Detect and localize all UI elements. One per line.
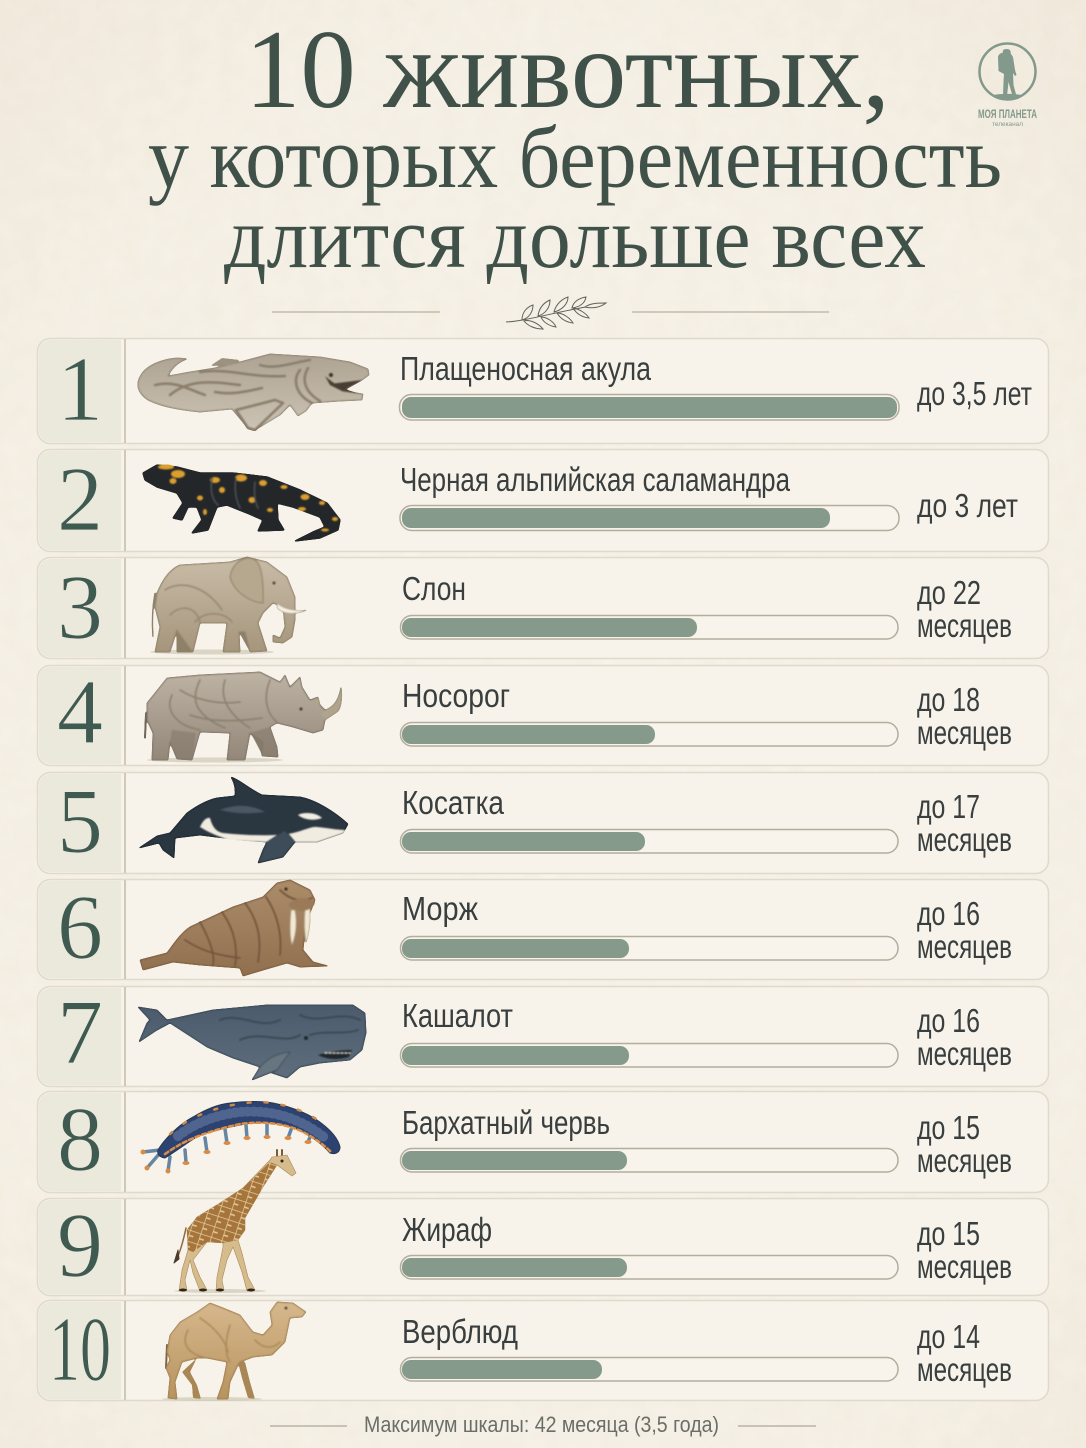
- duration: [917, 1215, 1012, 1285]
- logo: Моя Планета: телеканал: [992, 121, 1023, 128]
- title: у которых беременность: [148, 110, 1002, 207]
- duration: месяцев: [917, 1035, 1012, 1072]
- footer: scale note: Максимум шкалы: 42 месяца (3,5 года): [364, 1412, 719, 1437]
- title: 10 животных,: [245, 8, 890, 132]
- duration: до 15: [917, 1109, 980, 1146]
- duration: до 16: [917, 1002, 980, 1039]
- duration: месяцев: [917, 1142, 1012, 1179]
- number 8: 8: [57, 1088, 103, 1190]
- panel: row 9: [38, 1194, 1048, 1296]
- number 2: 2: [57, 448, 103, 550]
- duration: месяцев: [917, 714, 1012, 751]
- species name: Бархатный червь: [402, 1104, 610, 1141]
- species name: Носорог: [402, 677, 510, 714]
- duration: [917, 1318, 1012, 1388]
- title: длится дольше всех: [224, 190, 926, 287]
- bar: 15 months: [400, 1256, 898, 1279]
- panel: row 2: [38, 448, 1048, 552]
- icon: sperm whale: [138, 1005, 366, 1080]
- icon: elephant: [150, 557, 307, 654]
- species name: Косатка: [402, 784, 505, 821]
- icon: alpine salamander: [143, 464, 340, 541]
- number 6: 6: [57, 876, 103, 978]
- panel: row 4: [38, 661, 1048, 766]
- panel: row 7: [38, 981, 1048, 1086]
- duration: месяцев: [917, 928, 1012, 965]
- panel: row 6: [38, 876, 1048, 980]
- icon: orca: [139, 777, 348, 863]
- duration: до 3 лет: [917, 487, 1018, 524]
- bar: 18 months: [400, 722, 898, 746]
- bar: 36 months: [400, 506, 899, 530]
- bar: 22 months: [400, 616, 898, 639]
- panel: row 8: [38, 1088, 1048, 1192]
- duration: [917, 1109, 1012, 1179]
- species name: Плащеносная акула: [400, 350, 652, 387]
- bar: 16 months: [400, 936, 898, 960]
- bar: 14 months: [400, 1358, 898, 1381]
- number 1: 1: [57, 338, 103, 440]
- number 10: 10: [49, 1298, 111, 1400]
- duration: до 18: [917, 681, 980, 718]
- title: [148, 8, 1002, 287]
- duration: до 22: [917, 574, 981, 611]
- panel: row 3: [38, 556, 1048, 658]
- duration: до 14: [917, 1318, 980, 1355]
- duration: до 3,5 лет: [917, 375, 1032, 412]
- duration: [917, 895, 1012, 965]
- logo: Моя Планета: [978, 44, 1037, 128]
- panel: row 1: [38, 338, 1048, 444]
- number 4: 4: [57, 661, 103, 763]
- icon: walrus: [140, 880, 328, 976]
- icon: frilled shark: [138, 354, 369, 430]
- icon: velvet worm: [140, 1102, 340, 1174]
- species name: Жираф: [402, 1211, 492, 1248]
- duration: месяцев: [917, 821, 1012, 858]
- species name: Слон: [402, 570, 466, 607]
- icon: giraffe: [174, 1150, 296, 1293]
- panel: row 5: [38, 770, 1048, 874]
- bar: full 42 months: [400, 394, 899, 420]
- ornament: leaf divider: [272, 297, 829, 329]
- bar: 17 months: [400, 830, 898, 853]
- duration: месяцев: [917, 1351, 1012, 1388]
- duration: [917, 1002, 1012, 1072]
- duration: до 16: [917, 895, 980, 932]
- icon: camel: [162, 1302, 306, 1401]
- logo: Моя Планета: МОЯ ПЛАНЕТА: [978, 107, 1037, 121]
- duration: до 17: [917, 788, 980, 825]
- duration: месяцев: [917, 1248, 1012, 1285]
- number 3: 3: [57, 556, 103, 658]
- duration: до 15: [917, 1215, 980, 1252]
- species name: Кашалот: [402, 997, 513, 1034]
- duration: [917, 681, 1012, 751]
- species name: Черная альпийская саламандра: [400, 461, 790, 498]
- duration: [917, 788, 1012, 858]
- bar: 15 months: [400, 1148, 898, 1172]
- icon: rhinoceros: [145, 672, 342, 762]
- bar: 16 months: [400, 1044, 898, 1067]
- number 7: 7: [57, 981, 103, 1083]
- number 9: 9: [57, 1194, 103, 1296]
- species name: Верблюд: [402, 1313, 518, 1350]
- species name: Морж: [402, 890, 478, 927]
- number 5: 5: [57, 770, 103, 872]
- duration: [917, 574, 1012, 644]
- panel: row 10: [38, 1298, 1048, 1401]
- duration: месяцев: [917, 607, 1012, 644]
